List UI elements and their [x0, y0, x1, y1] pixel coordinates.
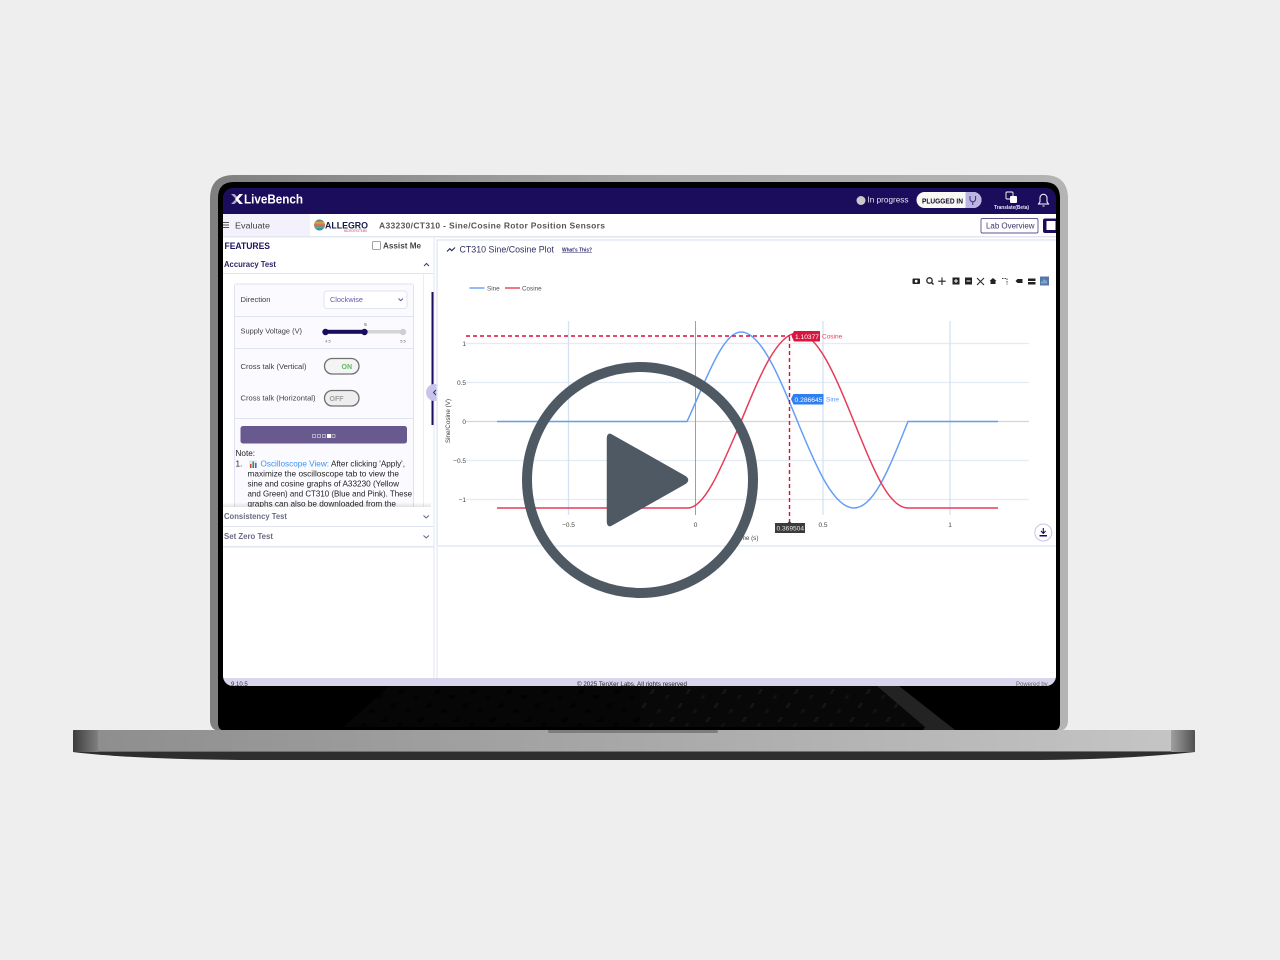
application screen	[223, 188, 1067, 688]
keyboard reflection	[343, 686, 955, 730]
x axis labels: 1	[948, 522, 952, 529]
control: supply voltage slider: 5.5	[400, 338, 407, 344]
y axis labels: 0.5	[457, 380, 466, 387]
legend: Sine	[487, 285, 500, 292]
scrollbar	[432, 292, 434, 425]
y axis title: Sine/Cosine (V)	[445, 399, 452, 443]
control: supply voltage slider: 5	[364, 322, 367, 327]
tooltip: cosine value: Cosine	[822, 334, 843, 340]
button: window	[1043, 218, 1056, 233]
note text: maximize the oscilloscope tab to view the	[248, 470, 399, 478]
label: Evaluate: Evaluate	[235, 220, 270, 230]
chart toolbar icons	[912, 276, 1049, 286]
logo: LiveBench: LiveBench	[244, 192, 303, 206]
chart title: What's This?	[562, 248, 592, 254]
button: Lab Overview	[981, 218, 1038, 233]
control: direction: Direction	[240, 295, 270, 304]
control: cross talk vertical: ON	[342, 364, 352, 371]
collapse button	[426, 384, 436, 401]
section header: Consistency Test	[223, 502, 434, 527]
laptop lid frame	[210, 175, 1068, 731]
controls card	[234, 284, 414, 524]
status: in progress: In progress	[868, 194, 908, 204]
chart title: CT310 Sine/Cosine Plot	[460, 244, 554, 254]
download button	[1035, 524, 1052, 541]
tooltip: time value	[775, 521, 805, 533]
sine curve	[497, 332, 998, 508]
play button	[527, 367, 753, 593]
laptop	[73, 175, 1195, 760]
control: cross talk horizontal: Cross talk (Horizontal)	[240, 394, 316, 402]
logo: Allegro	[314, 220, 368, 233]
legend	[470, 286, 542, 290]
logo: Allegro: MICROSYSTEMS	[344, 229, 368, 233]
note text: Oscilloscope View:	[260, 460, 329, 468]
footer bar: 9.10.5	[231, 682, 248, 688]
y axis labels	[453, 341, 466, 504]
note text: 1.	[236, 460, 242, 468]
footer bar: © 2025 TenXer Labs. All rights reserved	[577, 681, 687, 688]
control: supply voltage slider: 4.5	[325, 338, 332, 344]
play ring	[527, 367, 753, 593]
note text: Note:	[236, 449, 255, 458]
sub header	[223, 214, 1063, 238]
control: supply voltage slider: Supply Voltage (V)	[240, 326, 302, 336]
tooltip: sine value	[791, 394, 839, 404]
note text	[236, 449, 412, 508]
footer bar	[223, 678, 1056, 688]
x axis labels: −0.5	[562, 522, 575, 529]
cosine curve	[497, 333, 998, 508]
grid lines	[466, 321, 1029, 515]
assist me checkbox: Assist Me	[383, 240, 421, 250]
tooltip: cosine value: 1.10377	[795, 334, 819, 341]
y axis labels: 0	[462, 419, 466, 426]
bell icon	[1038, 194, 1048, 206]
apply button	[240, 426, 407, 444]
page title: A33230/CT310 - Sine/Cosine Rotor Position Sensors	[379, 220, 605, 230]
crosshair lines	[466, 336, 790, 523]
translate icon: Translate(Beta)	[994, 205, 1029, 211]
menu icon	[223, 222, 229, 228]
section header: Set Zero Test: Set Zero Test	[224, 532, 273, 541]
logo: LiveBench	[231, 194, 302, 204]
control: cross talk vertical: Cross talk (Vertical)	[240, 362, 307, 371]
control: cross talk horizontal	[240, 390, 359, 406]
tooltip: sine value: Sine	[826, 396, 839, 404]
logo: Allegro: ALLEGRO	[325, 220, 368, 232]
tooltip: sine value: 0.286645	[794, 397, 823, 404]
translate icon	[994, 192, 1029, 211]
top navigation bar	[223, 188, 1056, 214]
y axis labels: −0.5	[453, 458, 466, 465]
note text: graphs can also be downloaded from the	[248, 500, 396, 508]
play triangle	[608, 434, 688, 526]
x axis labels: 0	[694, 522, 698, 529]
screen bezel	[218, 182, 1060, 731]
plugged in pill: PLUGGED IN	[922, 196, 963, 206]
plugged in pill	[916, 192, 982, 208]
control: cross talk vertical	[240, 358, 359, 374]
tooltip: cosine value	[792, 331, 843, 342]
control: direction	[240, 291, 407, 308]
tooltip: time value: 0.369504	[776, 526, 804, 532]
x axis labels	[562, 522, 952, 527]
panel: features	[223, 238, 443, 678]
control: cross talk horizontal: OFF	[330, 396, 344, 403]
status: in progress	[856, 196, 908, 205]
section header: Accuracy Test: Accuracy Test	[224, 260, 276, 269]
footer bar: Powered by	[1016, 682, 1048, 688]
y axis labels: −1	[459, 497, 466, 504]
chart title	[446, 246, 592, 253]
laptop base	[73, 730, 1195, 760]
note text: and Green) and CT310 (Blue and Pink). These	[248, 490, 412, 498]
note text: sine and cosine graphs of A33230 (Yellow	[248, 480, 399, 488]
x axis title: Time (s)	[736, 535, 758, 542]
section header: Consistency Test: Consistency Test	[224, 512, 287, 521]
heading: features: FEATURES	[224, 241, 270, 251]
legend: Cosine	[522, 285, 542, 292]
scroll track	[423, 274, 424, 507]
x axis labels: 0.5	[818, 522, 828, 529]
y axis labels: 1	[462, 341, 466, 348]
control: supply voltage slider	[240, 322, 407, 344]
note text: After clicking 'Apply',	[331, 460, 405, 468]
panel: sine cosine chart	[437, 240, 1067, 546]
control: direction: Clockwise	[330, 295, 363, 304]
button: Lab Overview: Lab Overview	[986, 222, 1035, 230]
